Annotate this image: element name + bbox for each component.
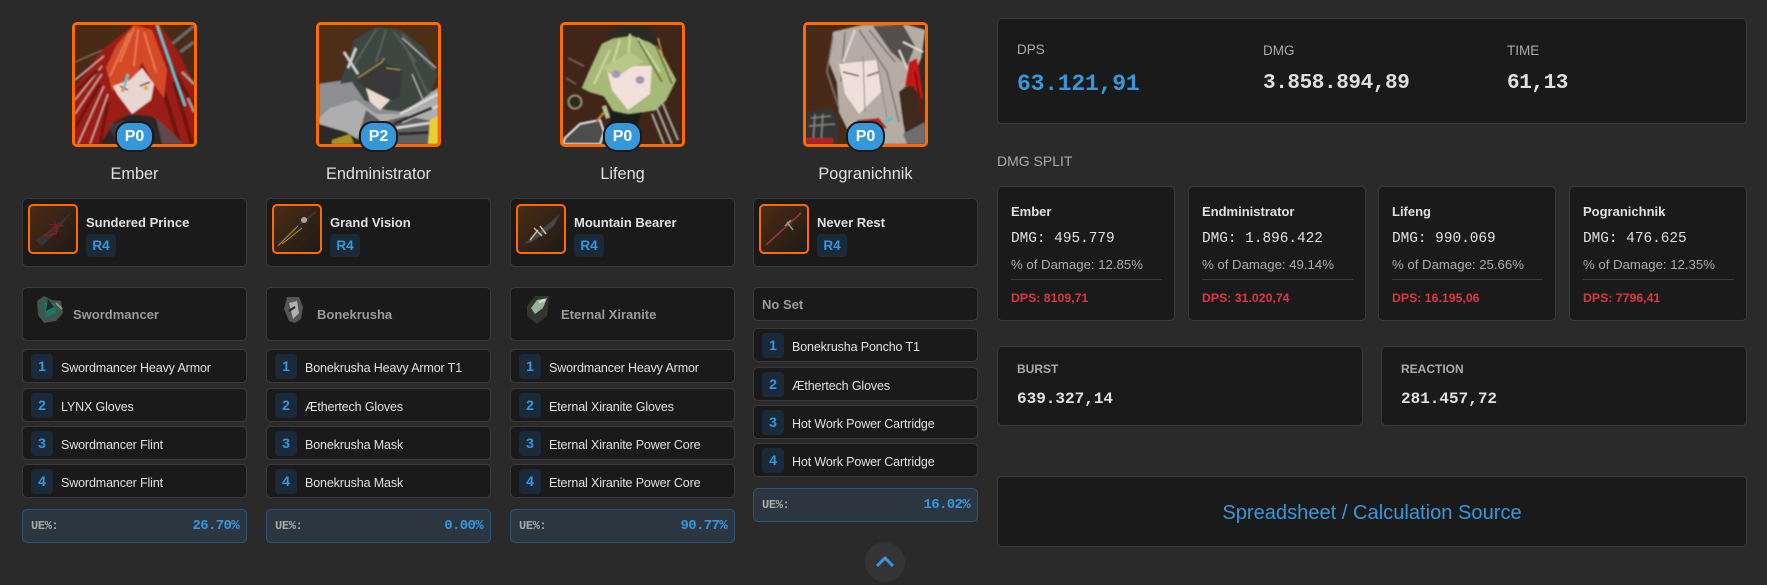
slot number bbox=[519, 431, 541, 456]
icon: Never Rest weapon bbox=[759, 204, 809, 254]
reaction value: 281.457,72 bbox=[1401, 390, 1497, 408]
UE percentage bbox=[510, 509, 735, 543]
slot number: 4 bbox=[526, 473, 534, 489]
DPS: DPS: 8109,71 bbox=[1011, 291, 1088, 305]
set name: Eternal Xiranite bbox=[561, 307, 656, 322]
weapon rank: R4 bbox=[336, 238, 354, 253]
panel: Ember damage bbox=[997, 186, 1175, 321]
icon: Eternal Xiranite set bbox=[527, 296, 549, 324]
gear set: Eternal Xiranite bbox=[510, 287, 735, 341]
character name: Endministrator: Endministrator bbox=[326, 165, 431, 183]
gear name: Eternal Xiranite Power Core bbox=[549, 438, 700, 452]
potential badge: P0: P0 bbox=[125, 128, 144, 145]
weapon name: Mountain Bearer bbox=[574, 215, 677, 230]
DMG value: 3.858.894,89 bbox=[1263, 72, 1409, 95]
percent of damage: % of Damage: 49.14% bbox=[1202, 257, 1334, 272]
gear slot 1 bbox=[266, 349, 491, 383]
damage: DMG: 495.779 bbox=[1011, 231, 1115, 247]
character column: Ember bbox=[22, 22, 247, 543]
gear slot 4 bbox=[510, 464, 735, 498]
panel: reaction bbox=[1381, 346, 1747, 426]
gear slot 1 bbox=[510, 349, 735, 383]
slot number: 2 bbox=[282, 397, 290, 413]
heading: DMG split: DMG SPLIT bbox=[997, 153, 1072, 169]
gear name: LYNX Gloves bbox=[61, 400, 134, 414]
slot number bbox=[31, 469, 53, 494]
slot number: 3 bbox=[282, 435, 290, 451]
character column: Pogranichnik bbox=[753, 22, 978, 522]
burst label: BURST bbox=[1017, 362, 1058, 376]
potential badge: P0: P0 bbox=[613, 128, 632, 145]
reaction label: REACTION bbox=[1401, 362, 1464, 376]
UE percentage bbox=[266, 509, 491, 543]
character name: Ember: Ember bbox=[111, 165, 158, 183]
slot number bbox=[31, 431, 53, 456]
name: Ember bbox=[1011, 204, 1051, 219]
burst value: 639.327,14 bbox=[1017, 390, 1113, 408]
slot number: 2 bbox=[38, 397, 46, 413]
weapon name: Never Rest bbox=[817, 215, 885, 230]
gear name: Swordmancer Heavy Armor bbox=[549, 361, 699, 375]
UE label: UE%: bbox=[275, 519, 302, 533]
slot number bbox=[275, 393, 297, 418]
potential badge: P0 bbox=[603, 121, 642, 152]
DMG label: DMG bbox=[1263, 43, 1294, 58]
slot number: 3 bbox=[38, 435, 46, 451]
slot number bbox=[275, 469, 297, 494]
gear name: Bonekrusha Heavy Armor T1 bbox=[305, 361, 462, 375]
potential badge: P0 bbox=[115, 121, 154, 152]
slot number bbox=[519, 469, 541, 494]
slot number bbox=[762, 372, 784, 397]
slot number bbox=[31, 393, 53, 418]
weapon rank: R4 bbox=[823, 238, 841, 253]
weapon rank bbox=[86, 234, 116, 257]
gear name: Hot Work Power Cartridge bbox=[792, 417, 935, 431]
character column: Endministrator bbox=[266, 22, 491, 543]
slot number bbox=[275, 354, 297, 379]
slot number bbox=[762, 448, 784, 473]
gear slot 4 bbox=[22, 464, 247, 498]
UE value: 90.77% bbox=[680, 518, 727, 534]
DPS value: 63.121,91 bbox=[1017, 71, 1139, 97]
link text: Spreadsheet / Calculation Source bbox=[1222, 502, 1522, 524]
set name: No Set bbox=[762, 297, 803, 312]
slot number: 2 bbox=[526, 397, 534, 413]
gear slot 1 bbox=[22, 349, 247, 383]
character name: Lifeng: Lifeng bbox=[600, 165, 645, 183]
icon: Mountain Bearer weapon bbox=[516, 204, 566, 254]
gear name: Eternal Xiranite Gloves bbox=[549, 400, 674, 414]
gear name: Æthertech Gloves bbox=[305, 400, 403, 414]
DPS label: DPS bbox=[1017, 42, 1045, 57]
weapon rank bbox=[574, 234, 604, 257]
slot number bbox=[519, 393, 541, 418]
UE percentage bbox=[22, 509, 247, 543]
gear slot 3 bbox=[510, 426, 735, 460]
gear set: Bonekrusha bbox=[266, 287, 491, 341]
portrait: Endministrator bbox=[316, 22, 441, 147]
gear set: No Set bbox=[753, 287, 978, 321]
gear slot 4 bbox=[753, 443, 978, 477]
gear name: Swordmancer Flint bbox=[61, 476, 163, 490]
slot number: 4 bbox=[282, 473, 290, 489]
gear slot 3 bbox=[266, 426, 491, 460]
icon: Sundered Prince weapon bbox=[28, 204, 78, 254]
icon: Grand Vision weapon bbox=[272, 204, 322, 254]
gear name: Hot Work Power Cartridge bbox=[792, 455, 935, 469]
weapon card: Mountain Bearer bbox=[510, 198, 735, 267]
gear slot 2 bbox=[510, 388, 735, 422]
damage: DMG: 1.896.422 bbox=[1202, 231, 1323, 247]
UE value: 26.70% bbox=[192, 518, 239, 534]
name: Pogranichnik bbox=[1583, 204, 1665, 219]
portrait: Pogranichnik bbox=[803, 22, 928, 147]
UE value: 0.00% bbox=[444, 518, 483, 534]
percent of damage: % of Damage: 12.35% bbox=[1583, 257, 1715, 272]
gear slot 3 bbox=[753, 405, 978, 439]
gear set: Swordmancer bbox=[22, 287, 247, 341]
weapon card: Sundered Prince bbox=[22, 198, 247, 267]
UE value: 16.02% bbox=[923, 497, 970, 513]
icon: Swordmancer set bbox=[37, 296, 63, 323]
slot number: 2 bbox=[769, 376, 777, 392]
portrait: Ember bbox=[72, 22, 197, 147]
character column: Lifeng bbox=[510, 22, 735, 543]
panel: total stats bbox=[997, 18, 1747, 124]
potential badge: P0: P0 bbox=[856, 128, 875, 145]
damage: DMG: 476.625 bbox=[1583, 231, 1687, 247]
weapon card: Grand Vision bbox=[266, 198, 491, 267]
DPS: DPS: 7796,41 bbox=[1583, 291, 1660, 305]
gear slot 2 bbox=[22, 388, 247, 422]
weapon name: Sundered Prince bbox=[86, 215, 189, 230]
slot number: 3 bbox=[526, 435, 534, 451]
gear slot 4 bbox=[266, 464, 491, 498]
percent of damage: % of Damage: 12.85% bbox=[1011, 257, 1143, 272]
potential badge: P2: P2 bbox=[369, 128, 388, 145]
damage: DMG: 990.069 bbox=[1392, 231, 1496, 247]
slot number: 1 bbox=[526, 358, 534, 374]
panel: burst bbox=[997, 346, 1363, 426]
UE label: UE%: bbox=[519, 519, 546, 533]
icon: Bonekrusha set bbox=[284, 297, 303, 323]
panel: source link bbox=[997, 476, 1747, 547]
gear slot 1 bbox=[753, 328, 978, 362]
gear name: Bonekrusha Poncho T1 bbox=[792, 340, 920, 354]
slot number: 1 bbox=[769, 337, 777, 353]
weapon rank bbox=[817, 234, 847, 257]
icon: scroll-to-top button bbox=[866, 542, 904, 582]
name: Endministrator bbox=[1202, 204, 1294, 219]
set name: Bonekrusha bbox=[317, 307, 392, 322]
TIME label: TIME bbox=[1507, 43, 1539, 58]
percent of damage: % of Damage: 25.66% bbox=[1392, 257, 1524, 272]
portrait: Lifeng bbox=[560, 22, 685, 147]
potential badge: P0 bbox=[846, 121, 885, 152]
DPS: DPS: 16.195,06 bbox=[1392, 291, 1480, 305]
slot number bbox=[275, 431, 297, 456]
gear name: Swordmancer Heavy Armor bbox=[61, 361, 211, 375]
gear name: Bonekrusha Mask bbox=[305, 476, 403, 490]
potential badge: P2 bbox=[359, 121, 398, 152]
panel: Lifeng damage bbox=[1378, 186, 1556, 321]
UE percentage bbox=[753, 488, 978, 522]
gear slot 3 bbox=[22, 426, 247, 460]
name: Lifeng bbox=[1392, 204, 1431, 219]
gear name: Æthertech Gloves bbox=[792, 379, 890, 393]
slot number: 4 bbox=[769, 452, 777, 468]
slot number: 3 bbox=[769, 414, 777, 430]
slot number bbox=[762, 410, 784, 435]
gear name: Bonekrusha Mask bbox=[305, 438, 403, 452]
slot number: 1 bbox=[38, 358, 46, 374]
UE label: UE%: bbox=[31, 519, 58, 533]
weapon rank bbox=[330, 234, 360, 257]
slot number bbox=[519, 354, 541, 379]
set name: Swordmancer bbox=[73, 307, 159, 322]
UE label: UE%: bbox=[762, 498, 789, 512]
slot number: 4 bbox=[38, 473, 46, 489]
weapon rank: R4 bbox=[92, 238, 110, 253]
gear slot 2 bbox=[266, 388, 491, 422]
gear name: Swordmancer Flint bbox=[61, 438, 163, 452]
weapon name: Grand Vision bbox=[330, 215, 411, 230]
weapon card: Never Rest bbox=[753, 198, 978, 267]
slot number bbox=[762, 333, 784, 358]
TIME value: 61,13 bbox=[1507, 72, 1568, 95]
DPS: DPS: 31.020,74 bbox=[1202, 291, 1290, 305]
panel: Pogranichnik damage bbox=[1569, 186, 1747, 321]
weapon rank: R4 bbox=[580, 238, 598, 253]
slot number: 1 bbox=[282, 358, 290, 374]
character name: Pogranichnik: Pogranichnik bbox=[818, 165, 913, 183]
panel: Endministrator damage bbox=[1188, 186, 1366, 321]
gear name: Eternal Xiranite Power Core bbox=[549, 476, 700, 490]
slot number bbox=[31, 354, 53, 379]
gear slot 2 bbox=[753, 367, 978, 401]
